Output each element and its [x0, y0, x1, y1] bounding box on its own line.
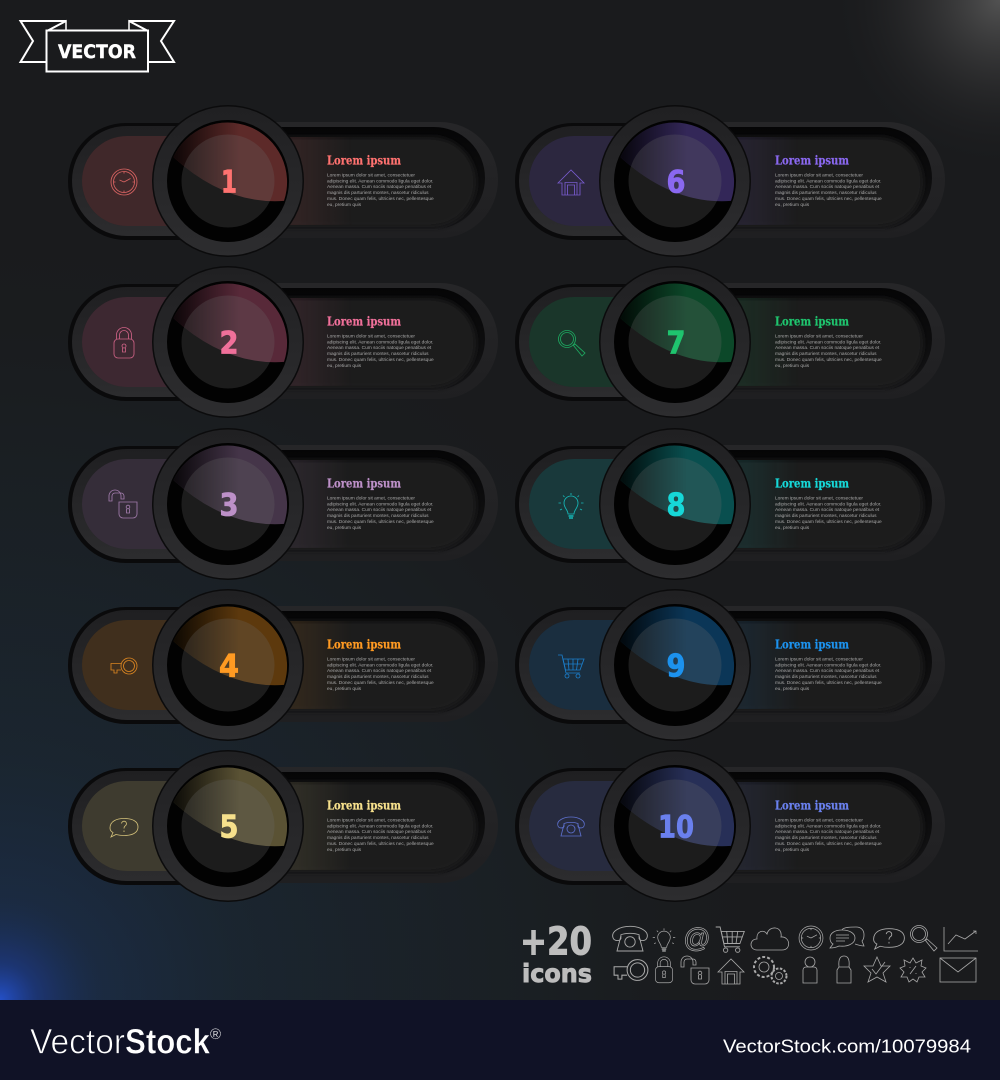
dial	[152, 266, 304, 418]
heading: Lorem ipsum	[775, 476, 849, 490]
heading: Lorem ipsum	[327, 152, 401, 168]
body text: adipiscing elit. Aenean commodo ligula eget dolor.	[327, 501, 433, 507]
icon: light bulb	[558, 493, 584, 518]
panel 5	[68, 750, 498, 902]
dial	[152, 105, 304, 257]
number: 4	[219, 648, 239, 684]
number: 9	[666, 648, 686, 684]
left pill	[68, 768, 318, 885]
heading: Lorem ipsum	[327, 314, 401, 328]
right pill	[635, 122, 945, 238]
body text: adipiscing elit. Aenean commodo ligula eget dolor.	[775, 501, 881, 507]
icon: home	[558, 170, 584, 195]
body text: Lorem ipsum dolor sit amet, consectetuer	[327, 818, 415, 824]
body text: Lorem ipsum dolor sit amet, consectetuer	[327, 334, 415, 340]
body text: Lorem ipsum dolor sit amet, consectetuer	[775, 656, 863, 662]
body text: eu, pretium quis	[327, 202, 362, 208]
logo: VectorStock: Vector	[30, 1022, 125, 1062]
icon: star	[864, 957, 890, 982]
left pill	[515, 768, 765, 885]
body text: mus. Donec quam felis, ultricies nec, pellentesque	[775, 196, 882, 202]
panel 1	[68, 105, 498, 257]
body text: mus. Donec quam felis, ultricies nec, pellentesque	[327, 357, 434, 363]
icon: question bubble	[110, 818, 138, 837]
panel 9	[515, 589, 945, 741]
body text: magnis dis parturient montes, nascetur ridiculus	[775, 674, 877, 680]
body text: mus. Donec quam felis, ultricies nec, pellentesque	[327, 196, 434, 202]
icon: chart	[944, 927, 978, 951]
icon: open lock	[681, 956, 709, 984]
right pill	[635, 283, 945, 399]
number: 2	[220, 326, 238, 362]
body text: Lorem ipsum dolor sit amet, consectetuer	[775, 818, 863, 824]
left pill	[68, 607, 318, 724]
icon: lock	[656, 957, 672, 983]
body text: magnis dis parturient montes, nascetur ridiculus	[327, 190, 429, 196]
right pill	[635, 767, 945, 883]
heading: Lorem ipsum	[775, 314, 849, 328]
badge: VECTOR ribbon	[20, 21, 174, 72]
icon: badge	[900, 958, 926, 982]
panel 8	[515, 428, 945, 580]
body text: magnis dis parturient montes, nascetur ridiculus	[327, 674, 429, 680]
body text: eu, pretium quis	[775, 525, 810, 531]
body text: Aenean massa. Cum sociis natoque penatibus et	[775, 829, 880, 835]
icon: key	[111, 658, 137, 674]
body text: Lorem ipsum dolor sit amet, consectetuer	[327, 172, 415, 178]
number: 8	[666, 488, 686, 524]
number: 1	[221, 164, 237, 200]
body text: Aenean massa. Cum sociis natoque penatibus et	[775, 345, 880, 351]
icon: cart	[558, 655, 584, 678]
icon: question	[874, 929, 904, 949]
body text: magnis dis parturient montes, nascetur ridiculus	[775, 190, 877, 196]
body text: adipiscing elit. Aenean commodo ligula eget dolor.	[327, 823, 433, 829]
body text: Lorem ipsum dolor sit amet, consectetuer	[775, 496, 863, 502]
dial	[152, 589, 304, 741]
body text: eu, pretium quis	[327, 686, 362, 692]
+20 icons label	[520, 920, 592, 988]
number: 7	[666, 326, 686, 362]
panel 10	[515, 750, 945, 902]
icon: clock	[111, 169, 137, 195]
body text: eu, pretium quis	[327, 525, 362, 531]
dial	[599, 750, 751, 902]
left pill	[515, 284, 765, 401]
heading: Lorem ipsum	[775, 636, 849, 652]
icon: envelope	[940, 958, 976, 982]
right pill	[635, 606, 945, 722]
number: 5	[220, 810, 238, 846]
panel 6	[515, 105, 945, 257]
body text: eu, pretium quis	[775, 363, 810, 369]
icon: telephone	[558, 817, 584, 836]
body text: Lorem ipsum dolor sit amet, consectetuer	[775, 172, 863, 178]
panel 7	[515, 266, 945, 418]
+20 icons label: +20	[520, 920, 592, 964]
body text: mus. Donec quam felis, ultricies nec, pellentesque	[327, 841, 434, 847]
left pill	[515, 123, 765, 240]
icon: telephone	[613, 926, 647, 951]
body text: eu, pretium quis	[775, 202, 810, 208]
panel 3	[68, 428, 498, 580]
icon set	[613, 923, 978, 984]
body text: mus. Donec quam felis, ultricies nec, pellentesque	[775, 680, 882, 686]
body text: mus. Donec quam felis, ultricies nec, pellentesque	[775, 519, 882, 525]
footer band	[0, 1000, 1000, 1080]
number: 6	[666, 164, 686, 200]
body text: adipiscing elit. Aenean commodo ligula eget dolor.	[775, 178, 881, 184]
right pill	[188, 122, 498, 238]
body text: adipiscing elit. Aenean commodo ligula eget dolor.	[327, 662, 433, 668]
icon: at sign: @	[683, 923, 711, 953]
body text: magnis dis parturient montes, nascetur ridiculus	[775, 835, 877, 841]
body text: magnis dis parturient montes, nascetur ridiculus	[775, 351, 877, 357]
dial	[152, 428, 304, 580]
panel 4	[68, 589, 498, 741]
body text: Lorem ipsum dolor sit amet, consectetuer	[327, 656, 415, 662]
icon: gears	[754, 957, 786, 984]
icon: key	[614, 960, 648, 980]
dial	[152, 750, 304, 902]
icon: magnifier	[558, 330, 585, 356]
body text: adipiscing elit. Aenean commodo ligula eget dolor.	[775, 662, 881, 668]
dial	[599, 589, 751, 741]
body text: adipiscing elit. Aenean commodo ligula eget dolor.	[327, 178, 433, 184]
left pill	[68, 123, 318, 240]
body text: magnis dis parturient montes, nascetur ridiculus	[327, 835, 429, 841]
image id: VectorStock.com/10079984	[723, 1036, 971, 1056]
icon: chat	[830, 927, 864, 948]
body text: Aenean massa. Cum sociis natoque penatibus et	[775, 184, 880, 190]
right pill	[188, 606, 498, 722]
body text: Lorem ipsum dolor sit amet, consectetuer	[775, 334, 863, 340]
icon: cloud	[751, 928, 789, 950]
icon: magnifier	[910, 926, 937, 951]
heading: Lorem ipsum	[775, 798, 849, 812]
body text: mus. Donec quam felis, ultricies nec, pellentesque	[775, 841, 882, 847]
number: 3	[220, 488, 238, 524]
dial	[599, 105, 751, 257]
icon: cart	[716, 927, 744, 952]
body text: mus. Donec quam felis, ultricies nec, pellentesque	[327, 680, 434, 686]
body text: adipiscing elit. Aenean commodo ligula eget dolor.	[775, 823, 881, 829]
body text: magnis dis parturient montes, nascetur ridiculus	[775, 513, 877, 519]
panel 2	[68, 266, 498, 418]
right pill	[188, 767, 498, 883]
left pill	[515, 446, 765, 563]
heading: Lorem ipsum	[327, 476, 401, 490]
body text: mus. Donec quam felis, ultricies nec, pellentesque	[327, 519, 434, 525]
body text: Aenean massa. Cum sociis natoque penatibus et	[327, 668, 432, 674]
body text: Aenean massa. Cum sociis natoque penatibus et	[327, 829, 432, 835]
left pill	[68, 284, 318, 401]
icon: woman	[837, 956, 851, 983]
right pill	[188, 283, 498, 399]
heading: Lorem ipsum	[327, 798, 401, 812]
icon: bulb	[653, 928, 675, 951]
icon: home	[718, 959, 744, 984]
body text: Lorem ipsum dolor sit amet, consectetuer	[327, 496, 415, 502]
body text: eu, pretium quis	[327, 363, 362, 369]
icon: open lock	[109, 490, 137, 518]
left pill	[68, 446, 318, 563]
body text: mus. Donec quam felis, ultricies nec, pellentesque	[775, 357, 882, 363]
+20 icons label: icons	[522, 959, 592, 988]
logo: VectorStock: ®	[210, 1026, 221, 1043]
body text: Aenean massa. Cum sociis natoque penatibus et	[327, 507, 432, 513]
body text: magnis dis parturient montes, nascetur ridiculus	[327, 513, 429, 519]
heading: Lorem ipsum	[775, 152, 849, 168]
body text: adipiscing elit. Aenean commodo ligula eget dolor.	[327, 339, 433, 345]
dial	[599, 266, 751, 418]
heading: Lorem ipsum	[327, 636, 401, 652]
body text: magnis dis parturient montes, nascetur ridiculus	[327, 351, 429, 357]
badge: VECTOR ribbon: VECTOR	[58, 42, 136, 63]
icon: man	[803, 957, 817, 983]
number: 10	[658, 810, 694, 846]
body text: Aenean massa. Cum sociis natoque penatibus et	[327, 184, 432, 190]
icon: lock	[114, 328, 134, 358]
body text: Aenean massa. Cum sociis natoque penatibus et	[775, 507, 880, 513]
body text: eu, pretium quis	[775, 686, 810, 692]
body text: Aenean massa. Cum sociis natoque penatibus et	[775, 668, 880, 674]
body text: eu, pretium quis	[775, 847, 810, 853]
left pill	[515, 607, 765, 724]
body text: adipiscing elit. Aenean commodo ligula eget dolor.	[775, 339, 881, 345]
icon: clock	[799, 926, 823, 950]
dial	[599, 428, 751, 580]
logo: VectorStock: Stock	[125, 1022, 210, 1062]
right pill	[635, 445, 945, 561]
right pill	[188, 445, 498, 561]
logo: VectorStock	[30, 1022, 221, 1062]
body text: Aenean massa. Cum sociis natoque penatibus et	[327, 345, 432, 351]
body text: eu, pretium quis	[327, 847, 362, 853]
